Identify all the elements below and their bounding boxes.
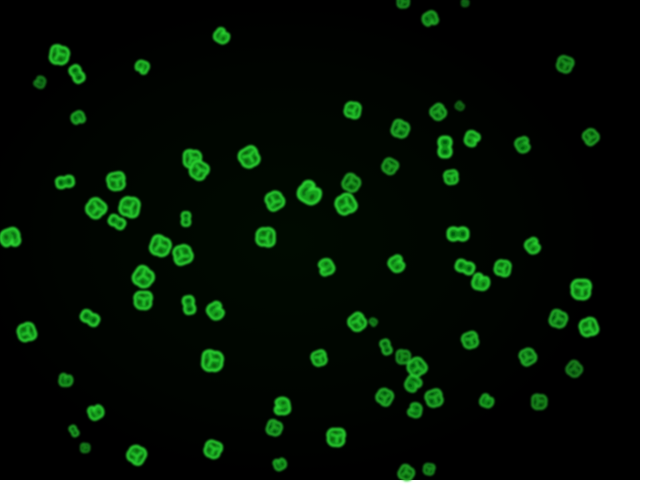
cells: left side [0,26,232,467]
cells: right side [428,0,601,411]
cells: centre [182,0,443,484]
